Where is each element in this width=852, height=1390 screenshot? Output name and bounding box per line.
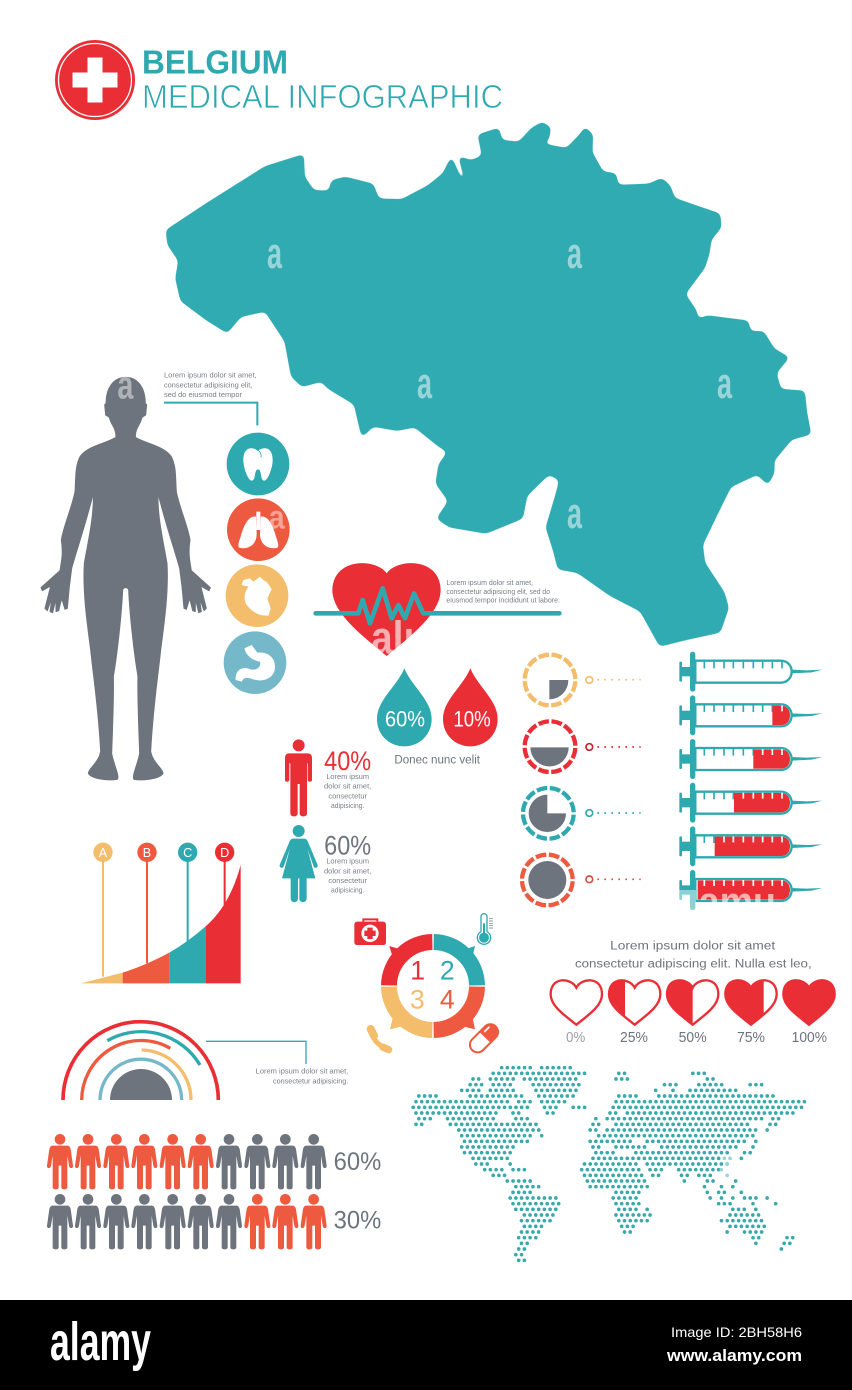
panel: numbered ring with icons — [354, 914, 835, 1056]
map of Belgium: a — [717, 359, 732, 408]
subtitle: MEDICAL INFOGRAPHIC — [142, 78, 503, 115]
heart callout text: consectetur adipisicing elit, sed do — [446, 589, 550, 596]
heart percent labels: 50% — [679, 1030, 707, 1046]
icon: telephone — [371, 1029, 389, 1050]
red blood drop 10%: 10% — [453, 707, 491, 732]
pin C: C — [183, 846, 192, 860]
icon: tooth — [227, 433, 289, 495]
syringe level 1 — [679, 695, 822, 735]
pin A: A — [99, 846, 108, 860]
drop caption: Donec nunc velit — [394, 753, 481, 767]
numbered segmented ring: 4 — [440, 984, 455, 1014]
heart percent labels: 25% — [620, 1030, 648, 1046]
male stat: dolor sit amet, — [324, 782, 371, 791]
icon: red cross logo — [55, 40, 135, 120]
female stat: consectetur — [328, 876, 368, 885]
dotted world map — [413, 1068, 805, 1260]
heart percent labels: 75% — [737, 1030, 765, 1046]
pin D: D — [220, 846, 229, 860]
syringe empty — [679, 652, 822, 692]
callout text: body: sed do eiusmod tempor — [164, 390, 243, 399]
teal blood drop 60% — [377, 668, 432, 746]
icon: heart with pulse: alı — [371, 611, 414, 663]
numbered segmented ring — [389, 942, 477, 1030]
people row 30% — [47, 1194, 327, 1249]
map of Belgium — [166, 122, 811, 647]
body and organ panel: a — [117, 363, 134, 407]
icon: man — [285, 739, 312, 816]
numbered segmented ring: 3 — [410, 984, 425, 1014]
heart 100% — [783, 980, 835, 1025]
heart 50% — [667, 980, 718, 1025]
hearts caption: consectetur adipiscing elit. Nulla est leo, — [575, 956, 812, 970]
icon: woman — [280, 825, 318, 902]
arc callout text: consectetur adipisicing. — [273, 1078, 348, 1085]
footer bar: www.alamy.com — [666, 1346, 802, 1365]
heart 0% — [551, 980, 602, 1025]
title: BELGIUM — [142, 44, 288, 80]
header — [55, 40, 503, 120]
male stat: 40% — [324, 746, 371, 776]
footer bar — [0, 1300, 852, 1390]
human body silhouette — [41, 377, 210, 780]
panel: heartbeat and blood drops — [280, 563, 560, 902]
arc leader line — [206, 1041, 306, 1064]
icon: stomach — [224, 631, 286, 694]
syringe level 4 — [679, 826, 822, 866]
syringe level 2 — [679, 739, 822, 779]
footer bar: alamy — [50, 1312, 151, 1372]
footer bar: Image ID: 2BH58H6 — [671, 1324, 802, 1340]
syringe full — [679, 870, 822, 912]
callout text: body — [164, 370, 257, 399]
icon: thermometer — [477, 914, 493, 944]
map of Belgium: a — [567, 489, 582, 538]
gauge ring 75% — [523, 788, 641, 839]
heart callout text: eiusmod tempor incididunt ut labore. — [446, 598, 560, 605]
numbered segmented ring: 1 — [410, 955, 425, 985]
teal blood drop 60%: 60% — [385, 707, 425, 732]
area chart with pins — [47, 843, 381, 1249]
red blood drop 10% — [443, 668, 498, 746]
area segments — [81, 865, 241, 983]
heart callout text — [446, 580, 560, 605]
female stat: dolor sit amet, — [324, 866, 371, 875]
pin B: B — [143, 846, 151, 860]
map of Belgium: a — [567, 229, 582, 278]
icon: first aid kit — [354, 919, 386, 945]
icon: pill — [467, 1021, 501, 1056]
gauge ring 25% — [525, 655, 641, 705]
people percent 60: 60% — [334, 1148, 381, 1176]
arc callout text — [256, 1069, 348, 1085]
callout text: body: consectetur adipisicing elit, — [164, 380, 252, 389]
hearts caption — [575, 939, 812, 970]
icon: heart organ — [226, 564, 288, 627]
numbered segmented ring: 2 — [440, 955, 455, 985]
male stat: Lorem ipsum — [326, 772, 369, 781]
people row 60% — [47, 1134, 327, 1189]
callout text: body: Lorem ipsum dolor sit amet, — [164, 370, 257, 379]
heart percent labels: 100% — [792, 1030, 827, 1046]
map of Belgium: a — [417, 359, 432, 408]
pin C — [178, 843, 197, 942]
male stat — [324, 746, 371, 810]
panel: ring gauges and syringes — [522, 652, 822, 924]
heart percent labels — [566, 1030, 827, 1046]
gauge ring 50% — [525, 721, 641, 772]
female stat — [324, 831, 371, 895]
people percent 30: 30% — [334, 1206, 381, 1234]
body and organ panel — [41, 363, 290, 780]
icon: lungs: a — [269, 499, 285, 536]
pin B — [137, 843, 157, 963]
rainbow arcs — [63, 1022, 218, 1100]
panel: ring gauges and syringes: amu — [699, 880, 776, 924]
female stat: adipisicing. — [331, 886, 364, 895]
pin A — [93, 843, 113, 977]
heart 25% — [609, 980, 660, 1025]
gauge ring 100% — [522, 855, 641, 905]
female stat: 60% — [324, 831, 371, 861]
heart 75% — [725, 980, 777, 1025]
callout leader line — [164, 403, 257, 425]
heart callout text: Lorem ipsum dolor sit amet, — [446, 580, 533, 587]
icon: heart with pulse — [316, 563, 559, 663]
arc callout text: Lorem ipsum dolor sit amet, — [256, 1069, 348, 1076]
icon: lungs — [227, 498, 290, 561]
male stat: consectetur — [328, 791, 368, 800]
syringe level 3 — [679, 783, 822, 823]
male stat: adipisicing. — [331, 801, 364, 810]
pin D — [215, 843, 234, 905]
map of Belgium: a — [267, 229, 282, 278]
hearts caption: Lorem ipsum dolor sit amet — [610, 939, 776, 953]
heart percent labels: 0% — [566, 1030, 585, 1046]
female stat: Lorem ipsum — [326, 857, 369, 866]
